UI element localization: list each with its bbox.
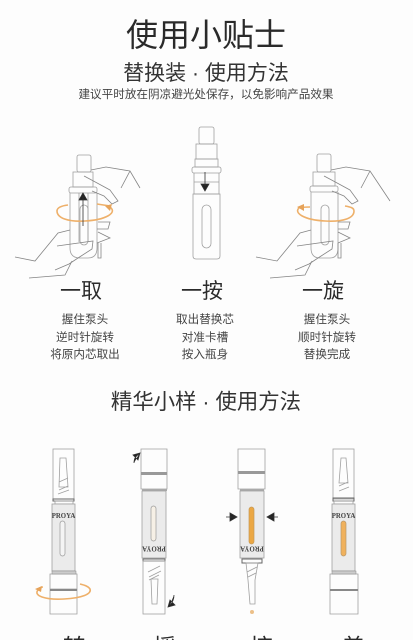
cap <box>141 449 167 491</box>
step 3 description: 替换完成 <box>304 347 351 361</box>
subtitle: sample: 精华小样 · 使用方法 <box>111 390 301 414</box>
arrow <box>226 513 237 521</box>
body <box>52 504 75 571</box>
cap with nozzle <box>333 449 354 504</box>
step 3 description <box>298 312 356 361</box>
hands <box>256 167 390 278</box>
step 2 description: 按入瓶身 <box>182 347 228 361</box>
subtitle: refill: 替换装 · 使用方法 <box>123 62 289 85</box>
step 1 label: 一取 <box>60 280 102 303</box>
bottle <box>310 154 338 258</box>
storage note: 建议平时放在阴凉避光处保存，以免影响产品效果 <box>78 87 334 101</box>
sample 1: twist <box>35 449 90 614</box>
step 1 description: 握住泵头 <box>62 312 108 326</box>
orange window <box>249 507 254 544</box>
nozzle <box>242 559 262 604</box>
step 2 description: 取出替换芯 <box>176 312 234 326</box>
rotation arrow <box>57 204 112 221</box>
base and nozzle <box>143 559 165 614</box>
cap <box>238 449 265 491</box>
cap with nozzle <box>53 449 74 504</box>
step 2 description: 对准卡槽 <box>182 330 229 344</box>
step 1 description: 将原内芯取出 <box>50 347 120 361</box>
brand: PROYA <box>332 513 355 520</box>
step 1 description <box>50 312 120 361</box>
sample 3: squeeze <box>226 449 278 614</box>
step 1 description: 逆时针旋转 <box>56 330 114 344</box>
bottle <box>69 155 97 258</box>
brand upside down: PROYA <box>240 544 264 552</box>
body <box>240 491 264 558</box>
step 2 label: 一按 <box>181 280 223 303</box>
sample 2: shake <box>133 449 175 614</box>
base <box>330 574 358 614</box>
illustration: press in <box>192 127 221 259</box>
step 3 description: 握住泵头 <box>304 312 350 326</box>
window <box>60 521 65 556</box>
rotation arrow <box>297 204 354 221</box>
bottle <box>192 127 221 259</box>
step 3 description: 顺时针旋转 <box>298 330 356 344</box>
sample 4: cap <box>330 449 358 614</box>
droplet <box>250 610 254 614</box>
rotation arrow <box>35 584 90 599</box>
hands <box>15 167 140 278</box>
sample labels, cropped at page bottom <box>40 634 365 640</box>
window <box>151 506 156 541</box>
up arrow <box>79 193 87 226</box>
orange window <box>341 521 346 556</box>
base <box>50 574 77 614</box>
step 2 description <box>176 312 234 361</box>
arrow <box>133 453 140 463</box>
brand: PROYA <box>52 513 75 520</box>
body <box>332 504 355 571</box>
arrow <box>168 595 175 607</box>
body <box>142 491 166 558</box>
illustration: take out <box>15 155 140 278</box>
step 3 label: 一旋 <box>302 280 344 303</box>
down arrow <box>201 172 209 191</box>
title: 使用小贴士 <box>126 17 286 53</box>
brand upside down: PROYA <box>142 544 166 552</box>
arrow <box>267 513 278 521</box>
illustration: rotate <box>256 154 390 278</box>
